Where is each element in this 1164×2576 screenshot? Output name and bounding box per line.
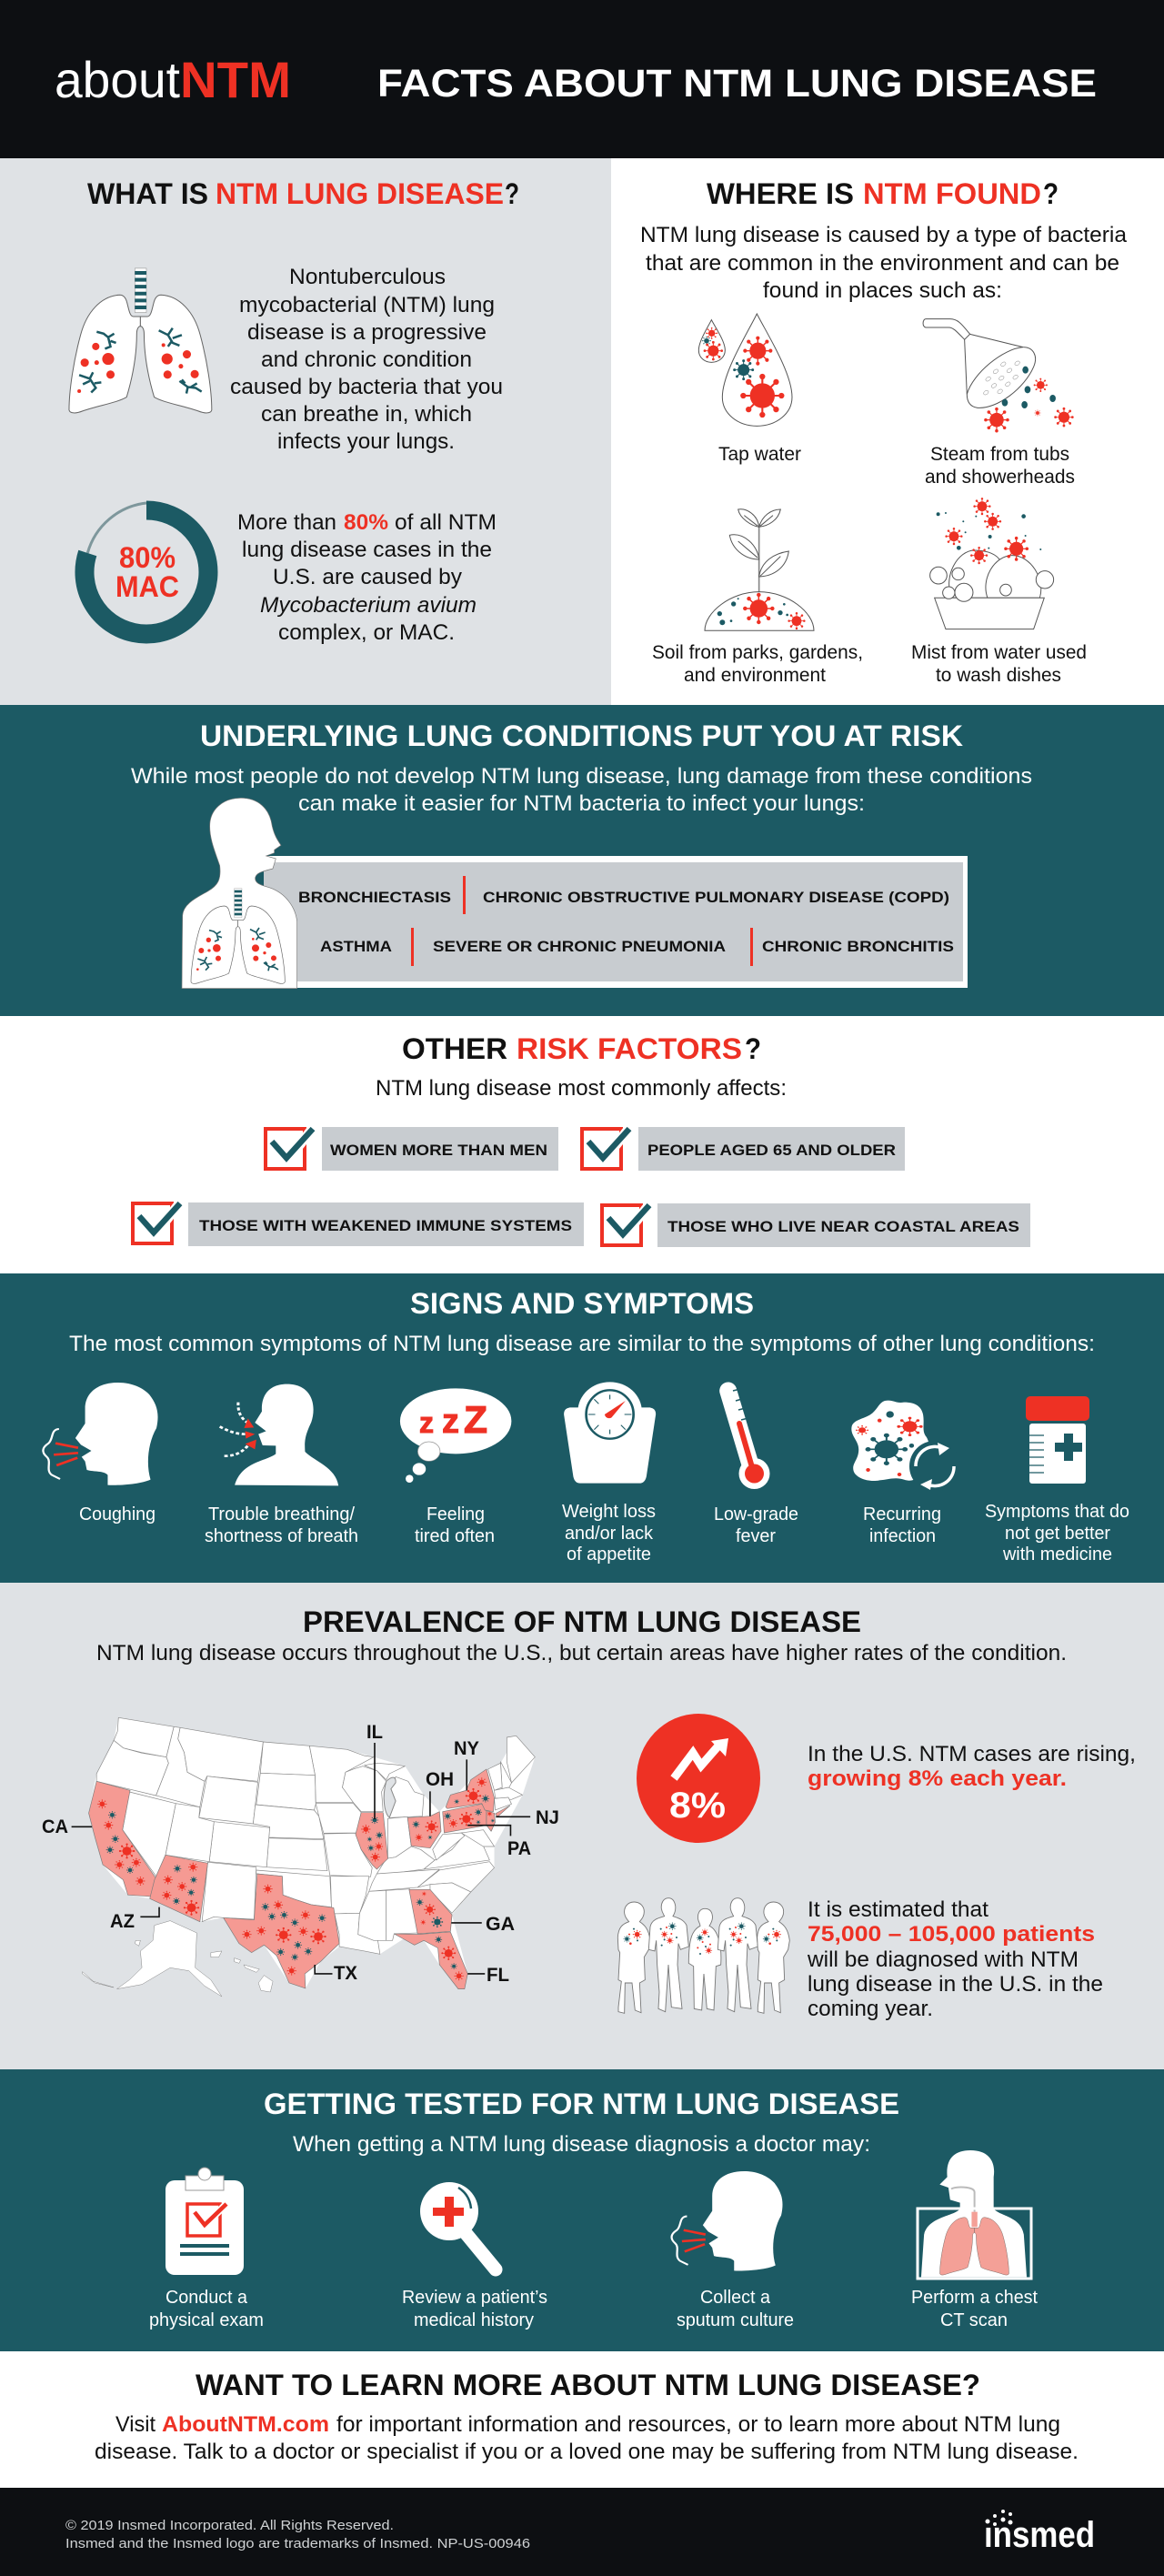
label: symptoms not better: not get better xyxy=(1005,1524,1110,1544)
heading: what is NTM lung disease: NTM LUNG DISEASE xyxy=(216,177,504,210)
text: MAC statistic: 80% xyxy=(344,510,388,535)
text: where intro: that are common in the environment and can be xyxy=(646,251,1119,276)
heading: getting tested: GETTING TESTED FOR NTM LUNG DISEASE xyxy=(264,2088,899,2120)
panel: other risk factors xyxy=(0,1016,1164,1273)
item: women more than men xyxy=(266,1127,558,1171)
text: definition of NTM lung disease: infects your lungs. xyxy=(277,429,455,454)
list: lung conditions box: BRONCHIECTASIS xyxy=(298,889,451,906)
text: copyright: © 2019 Insmed Incorporated. All Rights Reserved. xyxy=(65,2518,394,2533)
text: MAC statistic xyxy=(237,510,497,645)
label: feeling tired: tired often xyxy=(415,1526,495,1546)
heading: what is NTM lung disease xyxy=(87,177,519,210)
list: lung conditions box: SEVERE OR CHRONIC PNEUMONIA xyxy=(433,938,726,955)
icon: tap water drops xyxy=(698,314,792,426)
text: patients estimate: lung disease in the U.S. in the xyxy=(808,1972,1103,1997)
label: weight loss: of appetite xyxy=(567,1545,651,1565)
text: MAC statistic: complex, or MAC. xyxy=(278,620,455,645)
heading: want to learn more: WANT TO LEARN MORE ABOUT NTM LUNG DISEASE? xyxy=(196,2369,980,2401)
text: visit AboutNTM.com xyxy=(95,2412,1079,2464)
text: underlying intro: can make it easier for NTM bacteria to infect your lungs: xyxy=(298,791,865,816)
label: mist: to wash dishes xyxy=(936,665,1061,686)
text: visit AboutNTM.com: Visit xyxy=(115,2412,156,2437)
chart: 80% MAC donut xyxy=(85,503,208,634)
label: mist xyxy=(911,642,1087,686)
icon: medicine bottle xyxy=(1026,1396,1089,1484)
label: trouble breathing: Trouble breathing/ xyxy=(208,1504,355,1524)
item: women more than men: WOMEN MORE THAN MEN xyxy=(330,1142,547,1159)
label: feeling tired xyxy=(415,1504,495,1546)
chart: US map of high-rate states: TX xyxy=(334,1963,357,1984)
logo: aboutNTM xyxy=(55,51,291,108)
label: recurring infection: infection xyxy=(869,1526,936,1546)
panel: header xyxy=(0,0,1164,158)
heading: other risk factors: RISK FACTORS xyxy=(517,1032,742,1065)
label: symptoms not better: with medicine xyxy=(1002,1545,1112,1565)
icon: coughing head xyxy=(43,1383,158,1485)
text: definition of NTM lung disease: and chronic condition xyxy=(261,347,472,372)
heading: underlying conditions: UNDERLYING LUNG CONDITIONS PUT YOU AT RISK xyxy=(200,719,963,752)
text: MAC statistic: U.S. are caused by xyxy=(273,565,462,589)
heading: where is NTM found: NTM FOUND xyxy=(863,177,1041,210)
title: FACTS ABOUT NTM LUNG DISEASE xyxy=(377,62,1097,106)
icon: sleep thought bubble: Z xyxy=(464,1398,487,1441)
label: soil: Soil from parks, gardens, xyxy=(652,642,863,663)
panel: prevalence xyxy=(0,1583,1164,2069)
panel: underlying lung conditions xyxy=(0,705,1164,1016)
label: trouble breathing: shortness of breath xyxy=(205,1526,358,1546)
heading: what is NTM lung disease: WHAT IS xyxy=(87,177,208,210)
panel: signs and symptoms xyxy=(0,1273,1164,1583)
label: CT scan: CT scan xyxy=(940,2310,1008,2330)
text: prevalence intro: NTM lung disease occurs throughout the U.S., but certain areas have higher rates of the condition. xyxy=(96,1641,1067,1665)
icon: weight scale xyxy=(564,1382,656,1484)
label: tap water: Tap water xyxy=(718,444,801,465)
heading: other risk factors: ? xyxy=(745,1032,761,1065)
label: review history xyxy=(402,2288,547,2330)
heading: prevalence: PREVALENCE OF NTM LUNG DISEASE xyxy=(303,1605,861,1638)
heading: what is NTM lung disease: ? xyxy=(505,177,519,210)
text: visit AboutNTM.com: AboutNTM.com xyxy=(162,2412,329,2437)
icon: magnifying glass xyxy=(420,2182,496,2269)
text: MAC statistic: of all NTM xyxy=(395,510,497,535)
chart: US map of high-rate states: NJ xyxy=(536,1807,559,1828)
label: steam from tubs: Steam from tubs xyxy=(930,444,1069,465)
chart: US map of high-rate states xyxy=(42,1717,559,1997)
label: sputum culture: sputum culture xyxy=(677,2310,794,2330)
label: low-grade fever: fever xyxy=(736,1526,776,1546)
heading: other risk factors: OTHER xyxy=(402,1032,507,1065)
heading: where is NTM found: ? xyxy=(1043,177,1059,210)
chart: US map of high-rate states: PA xyxy=(507,1838,531,1859)
panel: footer xyxy=(0,2488,1164,2576)
icon: dishes in a basin xyxy=(930,498,1054,629)
label: CT scan: Perform a chest xyxy=(911,2288,1038,2308)
panel: what is NTM lung disease xyxy=(0,158,611,705)
icon: sleep thought bubble xyxy=(400,1388,511,1483)
text: definition of NTM lung disease: Nontuberculous xyxy=(289,265,446,289)
label: conduct a physical exam: Conduct a xyxy=(166,2288,248,2308)
label: conduct a physical exam xyxy=(149,2288,264,2330)
icon: sleep thought bubble: z xyxy=(419,1406,434,1439)
text: definition of NTM lung disease: disease is a progressive xyxy=(247,320,487,345)
label: steam from tubs xyxy=(925,444,1075,488)
logo: aboutNTM: about xyxy=(55,51,180,108)
icon: thermometer xyxy=(728,1389,769,1489)
text: patients estimate: It is estimated that xyxy=(808,1897,988,1922)
icon: chest CT scan xyxy=(918,2150,1031,2279)
chart: 80% MAC donut: 80% xyxy=(119,541,176,574)
label: sputum culture xyxy=(677,2288,794,2330)
text: where intro: NTM lung disease is caused by a type of bacteria xyxy=(640,223,1128,247)
label: symptoms not better: Symptoms that do xyxy=(985,1502,1129,1522)
text: risk intro: NTM lung disease most commonly affects: xyxy=(376,1076,787,1101)
label: weight loss: Weight loss xyxy=(562,1502,656,1522)
label: low-grade fever xyxy=(714,1504,798,1546)
text: testing intro: When getting a NTM lung disease diagnosis a doctor may: xyxy=(293,2132,870,2157)
heading: where is NTM found: WHERE IS xyxy=(707,177,854,210)
label: steam from tubs: and showerheads xyxy=(925,467,1075,488)
chart: US map of high-rate states: AZ xyxy=(110,1911,135,1932)
item: weakened immune systems: THOSE WITH WEAKENED IMMUNE SYSTEMS xyxy=(199,1217,572,1234)
label: conduct a physical exam: physical exam xyxy=(149,2310,264,2330)
text: definition of NTM lung disease xyxy=(230,265,503,454)
text: visit AboutNTM.com: for important information and resources, or to learn more about NTM lung xyxy=(336,2412,1060,2437)
icon: body silhouette with lungs xyxy=(182,798,297,989)
label: trouble breathing xyxy=(205,1504,358,1546)
chart: US map of high-rate states: FL xyxy=(487,1965,509,1986)
text: underlying intro xyxy=(131,764,1032,816)
text: where intro: found in places such as: xyxy=(763,278,1002,303)
icon: plant in soil xyxy=(705,509,814,630)
icon: sleep thought bubble: z xyxy=(442,1403,459,1441)
callout: 8% growth icon xyxy=(637,1714,760,1843)
label: review history: Review a patient’s xyxy=(402,2288,547,2308)
text: visit AboutNTM.com: disease. Talk to a doctor or specialist if you or a loved one may be suffering from NTM lung disease. xyxy=(95,2440,1079,2464)
label: soil: and environment xyxy=(684,665,826,686)
heading: signs and symptoms: SIGNS AND SYMPTOMS xyxy=(410,1287,754,1320)
icon: showerhead xyxy=(923,319,1073,432)
logo: aboutNTM: NTM xyxy=(180,51,291,108)
icon: infected lungs xyxy=(69,268,212,413)
chart: US map of high-rate states: NY xyxy=(454,1738,479,1759)
label: coughing: Coughing xyxy=(79,1504,156,1524)
text: symptoms intro: The most common symptoms of NTM lung disease are similar to the symptoms of other lung conditions: xyxy=(69,1332,1095,1356)
item: people aged 65 and older: PEOPLE AGED 65 AND OLDER xyxy=(647,1142,896,1159)
label: sputum culture: Collect a xyxy=(700,2288,771,2308)
text: copyright xyxy=(65,2518,530,2551)
label: low-grade fever: Low-grade xyxy=(714,1504,798,1524)
text: copyright: Insmed and the Insmed logo are trademarks of Insmed. NP-US-00946 xyxy=(65,2536,530,2551)
label: weight loss xyxy=(562,1502,656,1565)
text: MAC statistic: lung disease cases in the xyxy=(242,538,492,562)
text: patients estimate: 75,000 – 105,000 patients xyxy=(808,1922,1095,1947)
text: patients estimate: coming year. xyxy=(808,1997,933,2021)
text: MAC statistic: More than xyxy=(237,510,336,535)
text: MAC statistic: Mycobacterium avium xyxy=(260,593,477,618)
heading: where is NTM found xyxy=(707,177,1059,210)
text: cases rising: growing 8% each year. xyxy=(808,1766,1067,1791)
label: recurring infection xyxy=(863,1504,941,1546)
label: soil xyxy=(652,642,863,686)
text: definition of NTM lung disease: caused by bacteria that you xyxy=(230,375,503,399)
text: patients estimate: will be diagnosed with NTM xyxy=(807,1947,1079,1972)
icon: collect sputum xyxy=(672,2171,783,2270)
text: underlying intro: While most people do not develop NTM lung disease, lung damage from these conditions xyxy=(131,764,1032,789)
chart: 80% MAC donut: MAC xyxy=(115,570,179,603)
panel: where is NTM found xyxy=(611,158,1164,705)
text: definition of NTM lung disease: mycobacterial (NTM) lung xyxy=(239,293,495,317)
icon: trouble breathing xyxy=(220,1384,338,1485)
item: coastal areas xyxy=(602,1203,1030,1247)
label: symptoms not better xyxy=(985,1502,1129,1565)
chart: US map of high-rate states: CA xyxy=(42,1816,68,1837)
panel: getting tested xyxy=(0,2069,1164,2351)
label: recurring infection: Recurring xyxy=(863,1504,941,1524)
icon: group of people xyxy=(617,1898,789,2013)
heading: other risk factors xyxy=(402,1032,761,1065)
chart: US map of high-rate states: IL xyxy=(366,1722,383,1743)
item: people aged 65 and older xyxy=(582,1127,905,1171)
label: review history: medical history xyxy=(414,2310,534,2330)
label: mist: Mist from water used xyxy=(911,642,1087,663)
chart: US map of high-rate states: OH xyxy=(426,1769,454,1790)
text: cases rising: In the U.S. NTM cases are rising, xyxy=(808,1742,1136,1766)
panel: want to learn more xyxy=(0,2351,1164,2488)
label: feeling tired: Feeling xyxy=(426,1504,485,1524)
text: definition of NTM lung disease: can breathe in, which xyxy=(261,402,472,427)
list: lung conditions box: CHRONIC BRONCHITIS xyxy=(762,938,954,955)
list: lung conditions box xyxy=(264,856,968,988)
text: patients estimate xyxy=(807,1897,1103,2021)
list: lung conditions box: CHRONIC OBSTRUCTIVE PULMONARY DISEASE (COPD) xyxy=(483,889,949,906)
list: lung conditions box: ASTHMA xyxy=(320,938,392,955)
text: where intro xyxy=(640,223,1128,303)
chart: US map of high-rate states: GA xyxy=(486,1914,515,1935)
icon: clipboard xyxy=(166,2168,244,2275)
item: coastal areas: THOSE WHO LIVE NEAR COASTAL AREAS xyxy=(667,1218,1019,1235)
logo: Insmed: ınsmed xyxy=(984,2515,1095,2555)
item: weakened immune systems xyxy=(133,1202,584,1246)
callout: 8% growth icon: 8% xyxy=(669,1786,726,1826)
icon: recurring infection xyxy=(851,1401,960,1492)
label: CT scan xyxy=(911,2288,1038,2330)
text: cases rising xyxy=(808,1742,1136,1791)
label: weight loss: and/or lack xyxy=(565,1524,654,1544)
